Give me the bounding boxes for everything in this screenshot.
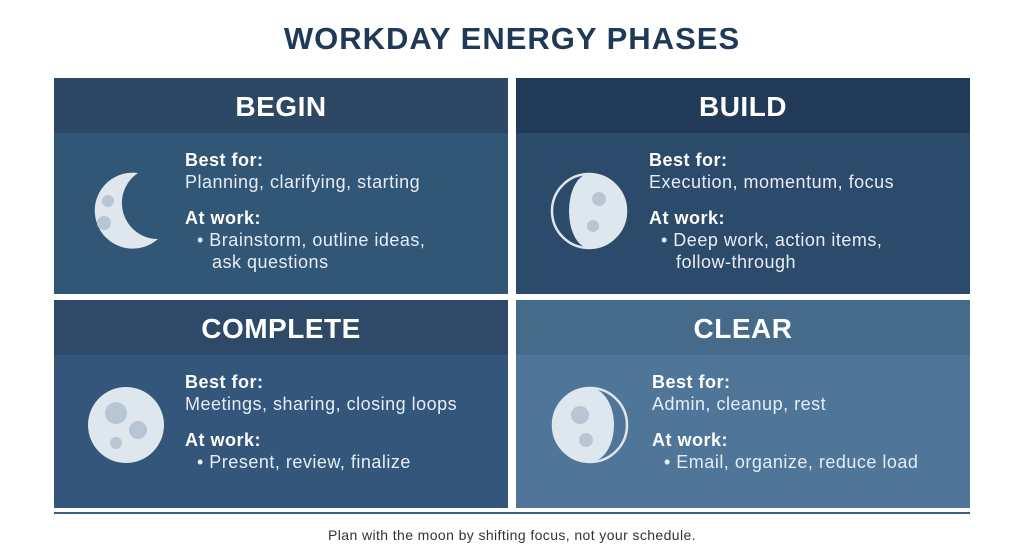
heading: begin [54, 78, 508, 133]
heading: build [516, 78, 970, 133]
panel: clear [516, 300, 970, 508]
footer caption: Plan with the moon by shifting focus, not your schedule. [328, 527, 696, 543]
text: build: Execution, momentum, focus At work: [649, 172, 894, 228]
text: build: Best for: [649, 150, 728, 170]
panel: complete [54, 300, 508, 508]
heading: complete: COMPLETE [201, 313, 361, 344]
panel: begin [54, 78, 508, 294]
icon: full moon [88, 387, 164, 463]
text: complete: Meetings, sharing, closing loops At work: [185, 394, 457, 450]
icon: crescent moon [94, 172, 158, 249]
panel: build [516, 78, 970, 294]
heading: complete [54, 300, 508, 355]
text: build [649, 150, 894, 272]
heading: build: BUILD [699, 91, 787, 122]
heading: clear: CLEAR [694, 313, 792, 344]
title: WORKDAY ENERGY PHASES [284, 21, 740, 56]
text: complete: Best for: [185, 372, 264, 392]
heading: begin: BEGIN [235, 91, 327, 122]
text: build: follow-through [676, 252, 796, 272]
text: complete: • Present, review, finalize [197, 452, 411, 472]
text: begin [185, 150, 425, 272]
text: complete [185, 372, 457, 472]
heading: clear [516, 300, 970, 355]
text: clear: Best for: [652, 372, 731, 392]
text: build: • Deep work, action items, [661, 230, 882, 250]
text: begin: • Brainstorm, outline ideas, [197, 230, 425, 250]
text: begin: ask questions [212, 252, 329, 272]
icon: waning moon [552, 386, 628, 464]
icon: quarter moon [550, 172, 628, 250]
text: clear: • Email, organize, reduce load [664, 452, 918, 472]
text: clear [652, 372, 918, 472]
text: begin: Best for: [185, 150, 264, 170]
text: begin: Planning, clarifying, starting At work: [185, 172, 420, 228]
text: clear: Admin, cleanup, rest At work: [652, 394, 826, 450]
